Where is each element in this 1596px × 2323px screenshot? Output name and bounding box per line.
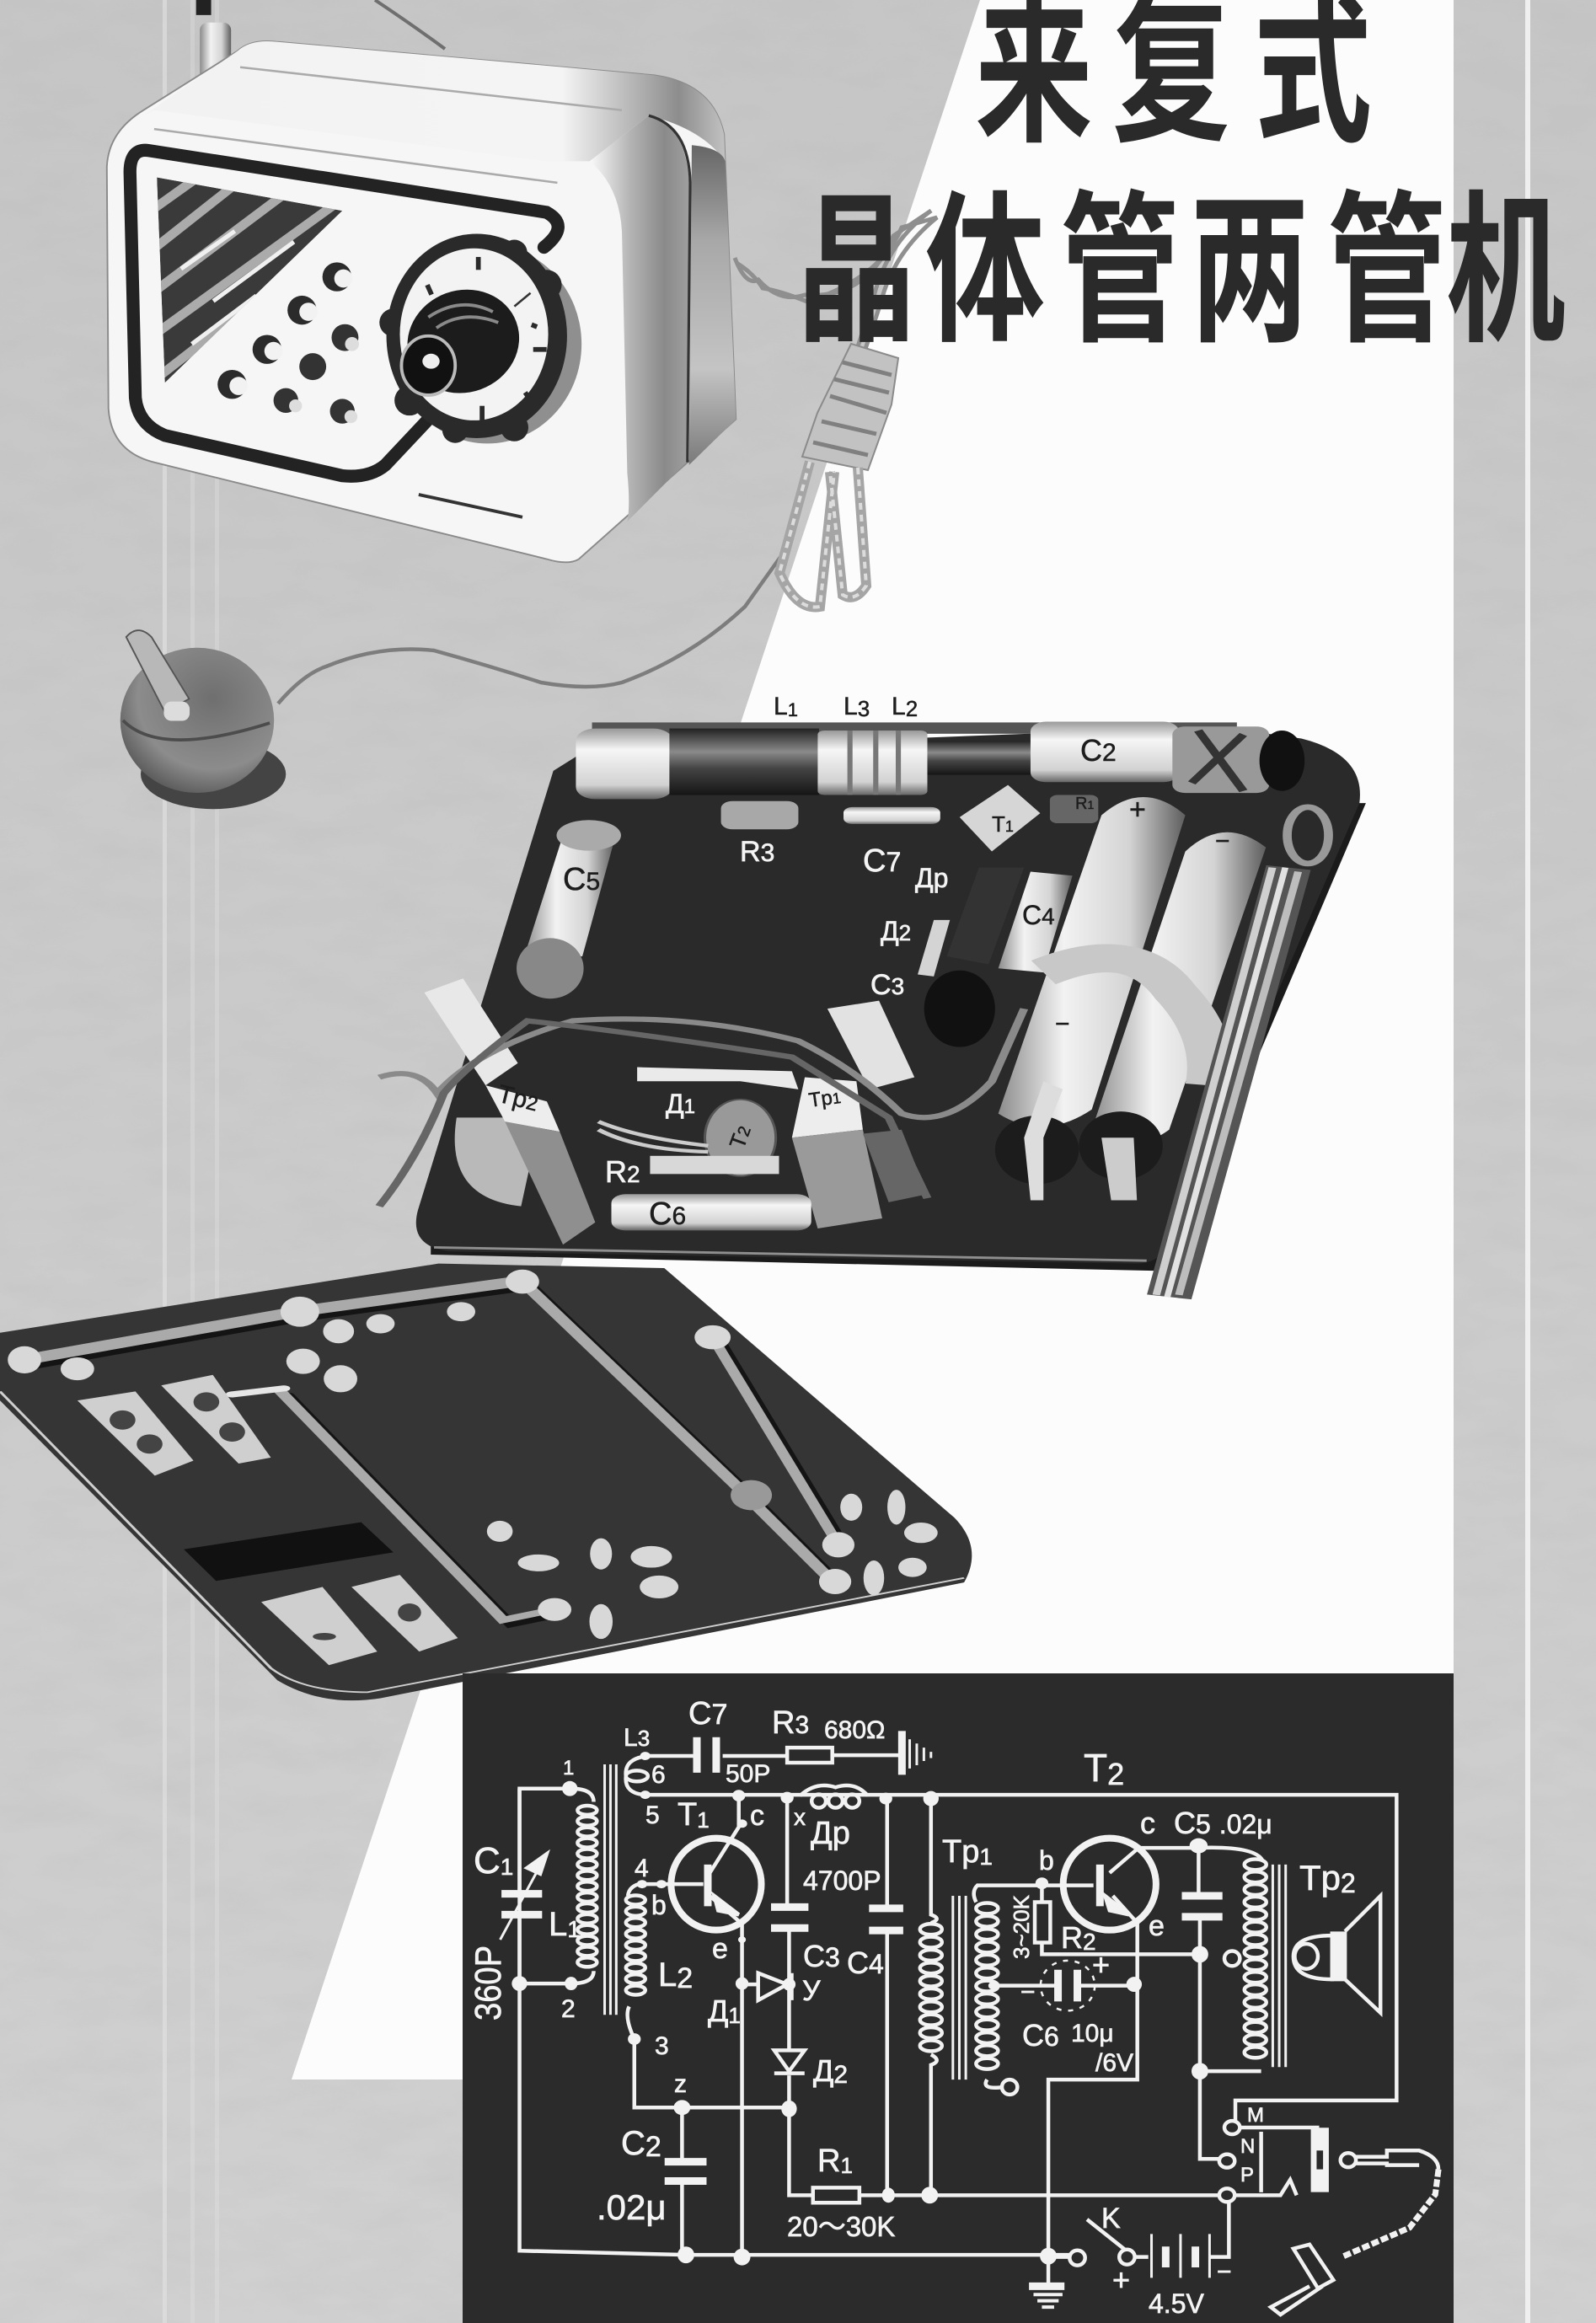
label T2 on transistor: T2 [724,1121,756,1152]
R3 resistor [787,1748,833,1763]
transformer Tp1 [792,1001,928,1228]
terminal rivets [110,1392,421,1641]
label L3: 3 [858,696,870,721]
label D1: 1 [728,2003,741,2028]
title line 2: 晶体管两管机 [796,181,1566,362]
battery front [999,797,1186,1127]
diode D2 [918,920,950,977]
battery rear [1092,832,1266,1143]
T2 leads [598,1121,708,1152]
label e T2: e [1149,1910,1165,1942]
label C4: C4 [847,1946,884,1980]
label c: c [750,1800,764,1832]
board component labels [495,693,1230,1232]
antenna ground arrow [910,1739,931,1769]
radio antenna socket [196,0,239,105]
label L1: L [549,1906,567,1943]
label R1: R [817,2144,840,2179]
label minus: − [1215,827,1230,855]
label T1: T [677,1797,697,1833]
R1 resistor [813,2187,860,2203]
black slot [184,1523,394,1581]
label L1: 1 [788,699,798,720]
battery strap [1043,958,1210,1085]
label 6V: /6V [1095,2049,1133,2077]
label plus C6: + [1092,1947,1110,1982]
resistor R1 [1050,795,1098,823]
label R2: 2 [1083,1929,1096,1955]
label T1: T1 [992,811,1014,837]
radio tuning dial [379,234,581,443]
label D1: Д [708,1994,728,2028]
label minus C6: − [1020,1978,1036,2006]
label e T1: e [712,1933,728,1965]
radio body [107,41,736,562]
copper trace shadows [32,1286,846,1624]
label battery plus: + [1112,2262,1130,2297]
radio speaker holes [217,262,359,424]
iron cores [605,1764,1286,2079]
diode D1 [637,1068,798,1089]
label D2: Д2 [881,916,911,946]
label M: M [1247,2104,1264,2127]
transistor T1 [960,785,1040,852]
label 4700P: 4700P [803,1865,881,1896]
radio top seam [154,67,622,183]
C1 trimmer arrow [501,1856,545,1940]
radio side seam [649,115,690,463]
label Tp1: 1 [979,1844,993,1870]
label R3: R3 [772,1705,809,1741]
label L1: 1 [567,1916,581,1942]
label T1: 1 [697,1807,710,1833]
printed circuit board underside [0,1264,972,1700]
label C5: C5 [563,862,600,897]
label plus: + [1129,794,1146,826]
label Tp2: Tp2 [495,1080,541,1116]
open terminals [1002,1951,1240,2266]
wiring [520,1789,1074,2255]
label b T2: b [1039,1845,1054,1876]
copper traces [24,1282,838,1620]
label c T2: c [1140,1806,1155,1840]
label K: K [1101,2203,1121,2235]
label 3~20K: 3~20K [1009,1894,1034,1959]
label C2: 2 [645,2131,661,2163]
coil L2 [626,1896,645,1994]
label R2: R [1061,1920,1083,1955]
label 360P: 360P [468,1946,509,2021]
choke inductor [946,868,1024,965]
coil L3 [626,1770,648,1781]
panel background [463,1673,1454,2323]
schematic labels [468,1696,1356,2319]
label C2: C [621,2125,645,2162]
twisted cord from radio [735,211,937,354]
radio speaker grille [157,177,342,383]
node label 1: 1 [563,1757,574,1780]
choke coil [811,1795,860,1807]
radio illustration [107,0,736,809]
battery terminals [995,1081,1163,1200]
capacitor C7 [844,807,940,824]
label C5 value: C5 .02μ [1174,1806,1272,1840]
capacitor C4 [999,871,1073,972]
label D1: Д1 [666,1089,695,1119]
capacitor C5 [517,820,621,998]
C6 dashed outline [1041,1961,1095,2010]
label Tp1: Tp1 [807,1085,842,1112]
label R1: R1 [1075,795,1094,813]
label C6: C6 [649,1196,686,1232]
label R3: R3 [740,836,774,868]
label L2: L [892,693,906,720]
R2 resistor [1035,1902,1050,1943]
node label 4: 4 [635,1855,649,1882]
label C1: C [474,1840,501,1881]
radio bottom slot [419,495,522,517]
solder pads [8,1270,938,1639]
label Tp1: Tp [942,1834,979,1870]
label P: P [1240,2164,1254,2187]
label C6: C6 [1022,2018,1059,2053]
radio rear side band [689,145,736,465]
label L3: L [844,693,858,720]
earphone cord [278,554,783,704]
label T2: T [1084,1746,1107,1790]
battery plates [1152,2234,1209,2278]
resistor R2 [650,1156,779,1174]
diode D1 [758,1973,791,2000]
label C3: C3 [803,1939,840,1973]
label 20~30K: 20～30K [787,2211,895,2242]
label C1: 1 [501,1854,513,1880]
label Tp2: 2 [1341,1868,1356,1898]
label T2: 2 [1107,1757,1124,1791]
headphone jack socket [1313,2130,1327,2190]
label D2: 2 [833,2061,848,2089]
label Dr: Др [811,1816,850,1851]
component board assembly [379,721,1366,1297]
label D2: Д [813,2053,833,2088]
emitter arrows [715,1896,1129,1914]
cord bundle [779,344,898,607]
radio dark outline band [130,150,558,476]
label N: N [1240,2135,1255,2158]
label C2: C2 [1080,733,1117,768]
board plate [416,726,1360,1264]
background: white diagonal light beam [292,0,1454,2079]
twisted cable [1156,807,1329,1297]
node label 3: 3 [655,2032,669,2060]
label L2: 2 [677,1962,693,1994]
circuit schematic panel [463,1673,1454,2323]
transistor bars [708,1865,1100,1906]
board edge highlight [434,1247,1147,1261]
label b T1: b [651,1890,667,1920]
label Y: У [802,1975,821,2007]
earth symbol [1033,2294,1063,2307]
earphone plug and chain [1271,2150,1438,2315]
twisted wires [379,1009,1024,1207]
board edge highlight [0,1391,964,1692]
diode D2 [774,2050,805,2074]
transistor T2 [704,1100,776,1176]
junction dots [511,1752,1208,2266]
node label 5: 5 [645,1801,660,1829]
label 50P: 50P [726,1760,770,1788]
label Dr: Др [915,863,948,893]
label x: x [794,1804,806,1830]
coil Tp2 [1245,1859,1267,2058]
board plate [0,1264,972,1700]
earphone plug [121,630,286,809]
label Tp2: Tp [1299,1858,1341,1897]
coil Tp1 secondary [976,1903,998,2069]
terminal plates [78,1375,458,1665]
label R2: R2 [605,1154,640,1189]
label R1: 1 [840,2153,853,2178]
label .02u: .02μ [597,2187,667,2227]
capacitor C3 disc [924,971,995,1047]
label L3: L3 [624,1724,650,1752]
speaker [1293,1896,1380,2013]
node label 2: 2 [561,1995,576,2023]
label 680 ohm: 680Ω [824,1716,885,1744]
label 10u: 10μ [1071,2020,1114,2047]
top wire [375,0,445,49]
transistor T1 symbol [671,1839,762,1930]
ferrite antenna rod [576,721,1304,799]
coil Tp1 primary [920,1924,942,2051]
label L2: 2 [906,696,918,721]
board shadow and edge [431,803,1366,1271]
label C4: C4 [1022,900,1055,930]
resistor R3 [721,801,798,829]
label 4.5V: 4.5V [1149,2288,1204,2319]
label battery minus: − [1217,2258,1232,2286]
coil L1 [577,1806,597,1967]
radio right side band [590,115,689,522]
label Z: z [674,2070,687,2098]
node label 6: 6 [651,1761,666,1789]
label L2: L [658,1956,677,1994]
schematic drawing [501,1731,1438,2315]
label battery minus: − [1055,1010,1070,1038]
label C7: C7 [688,1696,727,1732]
label L1: L [774,693,788,720]
label C3: C3 [870,969,904,1001]
label C7: C7 [863,843,901,879]
transformer Tp2 [425,978,595,1244]
capacitor plates [501,1731,1223,2286]
capacitor C6 [612,1194,811,1230]
radio top face [143,41,725,161]
transistor T2 symbol [1063,1839,1156,1930]
